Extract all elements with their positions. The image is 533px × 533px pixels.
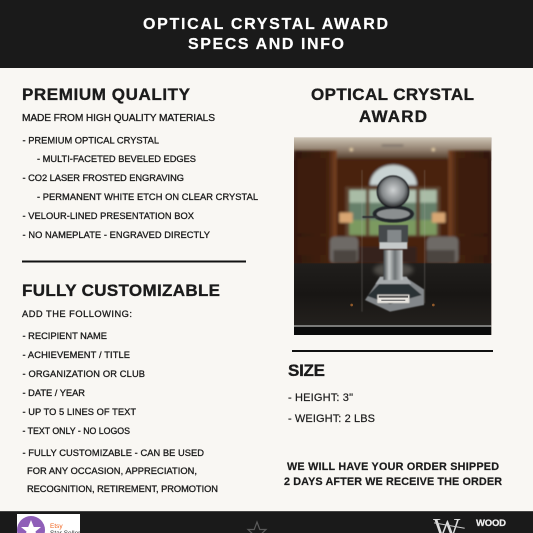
logo: wood unlimited — [433, 513, 516, 533]
list: materials: - MULTI-FACETED BEVELED EDGES — [37, 154, 196, 164]
callout: shipping note: 2 DAYS AFTER WE RECEIVE THE ORDER — [284, 476, 502, 488]
header banner — [0, 0, 533, 68]
callout: shipping note: WE WILL HAVE YOUR ORDER SHIPPED — [287, 461, 499, 473]
list: materials: - NO NAMEPLATE - ENGRAVED DIRECTLY — [22, 230, 210, 240]
list: materials: - CO2 LASER FROSTED ENGRAVING — [22, 173, 184, 183]
list: custom options — [22, 331, 145, 436]
icon: etsy star seller badge: Etsy — [50, 523, 63, 530]
footer bar — [0, 511, 533, 533]
list: materials: - PREMIUM OPTICAL CRYSTAL — [22, 136, 159, 146]
heading: optical crystal award — [311, 85, 474, 126]
header banner: SPECS AND INFO — [188, 36, 344, 53]
callout: shipping note — [284, 461, 502, 488]
logo: wood unlimited: WOOD — [476, 518, 506, 529]
subheading: add the following: ADD THE FOLLOWING: — [22, 309, 132, 319]
photo: crystal golf trophy in clubhouse — [294, 137, 491, 335]
list: custom options: - ACHIEVEMENT / TITLE — [22, 350, 130, 360]
icon: etsy star seller badge — [17, 514, 81, 533]
list: materials — [22, 136, 258, 240]
list: custom options: - UP TO 5 LINES OF TEXT — [22, 407, 136, 417]
list: custom options: - ORGANIZATION OR CLUB — [22, 369, 145, 379]
text block: occasions: - FULLY CUSTOMIZABLE - CAN BE USED — [22, 448, 204, 458]
header banner: OPTICAL CRYSTAL AWARD — [143, 16, 388, 33]
panel: size — [288, 361, 375, 425]
panel: fully customizable — [22, 281, 220, 494]
heading: optical crystal award: AWARD — [359, 107, 427, 126]
list: custom options: - DATE / YEAR — [22, 388, 85, 398]
text block: occasions: FOR ANY OCCASION, APPRECIATION, — [27, 466, 197, 476]
text block: dimensions — [288, 392, 375, 425]
text block: dimensions: - WEIGHT: 2 LBS — [288, 413, 375, 425]
panel: premium quality — [22, 85, 258, 240]
heading: optical crystal award: OPTICAL CRYSTAL — [311, 85, 474, 104]
text block: occasions — [22, 448, 218, 494]
heading: fully customizable: FULLY CUSTOMIZABLE — [22, 281, 220, 300]
list: custom options: - RECIPIENT NAME — [22, 331, 107, 341]
heading: premium quality: PREMIUM QUALITY — [22, 85, 191, 104]
text block: dimensions: - HEIGHT: 3" — [288, 392, 353, 404]
list: materials: - VELOUR-LINED PRESENTATION BOX — [22, 211, 194, 221]
icon: trophy — [362, 170, 425, 312]
subheading: materials: MADE FROM HIGH QUALITY MATERIALS — [22, 113, 215, 124]
list: custom options: - TEXT ONLY - NO LOGOS — [22, 426, 130, 436]
icon: star outline — [248, 522, 266, 533]
text block: occasions: RECOGNITION, RETIREMENT, PROMOTION — [27, 484, 218, 494]
heading: size: SIZE — [288, 361, 325, 380]
list: materials: - PERMANENT WHITE ETCH ON CLEAR CRYSTAL — [37, 192, 258, 202]
